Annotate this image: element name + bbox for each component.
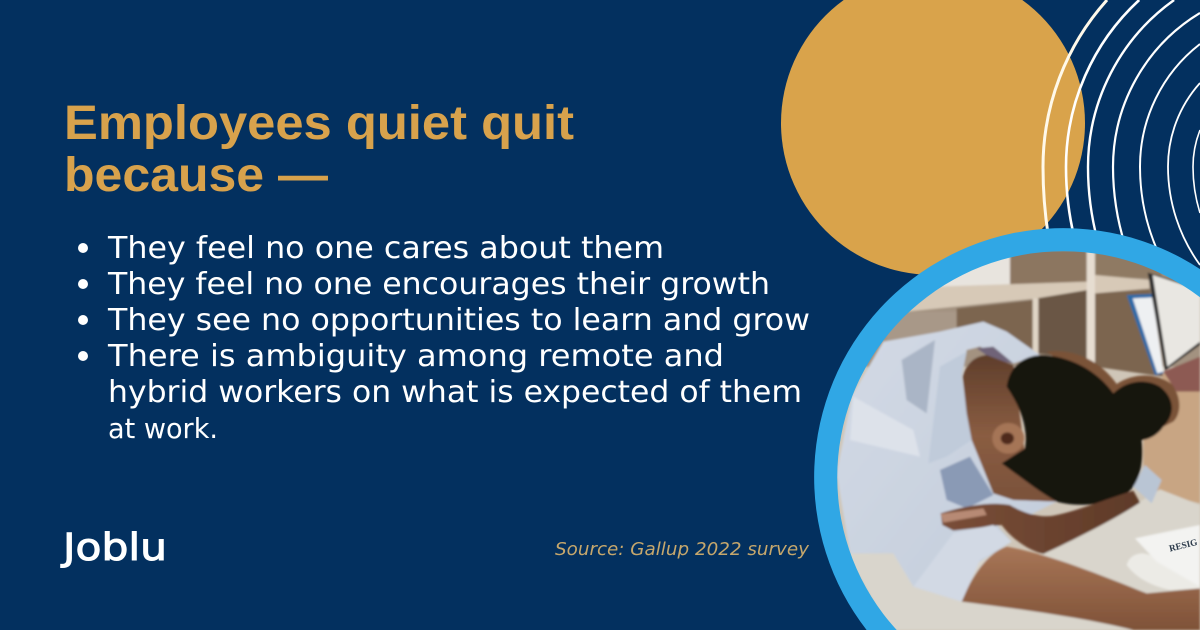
heading: because — [64,149,328,202]
source note: Source: Gallup 2022 survey [555,540,810,560]
forearm and hand [941,491,1200,630]
shelves background [837,250,1200,377]
bullet list: hybrid workers on what is expected of them [108,375,802,410]
blue ring [814,228,1200,630]
gold circle [781,0,1085,275]
neck and face [963,355,1057,502]
bullet list: at work. [108,412,218,445]
bullet list: They see no opportunities to learn and grow [107,303,810,338]
heading: Employees quiet quit [64,97,574,150]
photo: exhausted worker at desk [837,250,1200,630]
cardboard box [1143,357,1200,503]
paper label: RESIG [1168,538,1199,555]
desk [847,489,1200,630]
clipboards [1127,273,1200,375]
bullet list: They feel no one cares about them [107,231,664,266]
bullet list: There is ambiguity among remote and [107,339,724,374]
shirt [837,322,1162,602]
heading [64,97,574,202]
hair [1002,351,1179,505]
bullet list: They feel no one encourages their growth [107,267,770,302]
concentric white arcs [1043,0,1200,265]
Joblu logo: Joblu [61,526,167,569]
bullet list [78,231,810,445]
resignation paper [1127,525,1200,590]
rolled sleeve [913,525,1012,602]
